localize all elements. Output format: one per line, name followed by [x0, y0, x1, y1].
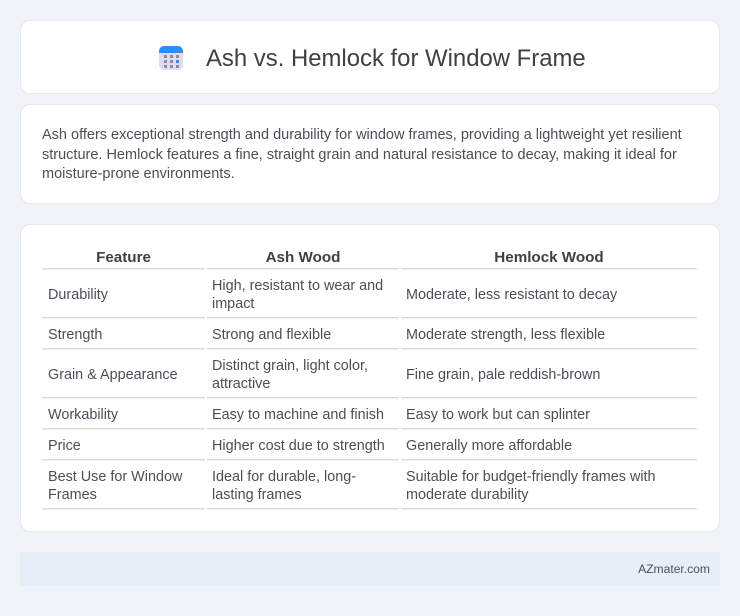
row: best use for window frames: lasting frames: [212, 487, 302, 503]
row: grain and appearance: [42, 358, 697, 399]
intro text: Ash offers exceptional strength and durability for window frames, providing a lightweight yet resilient: [42, 127, 682, 143]
row: durability: [42, 278, 697, 319]
row: strength: Strong and flexible: [212, 327, 331, 343]
row: workability: [42, 407, 697, 430]
panel: comparison table: [20, 224, 720, 532]
row: strength: Moderate strength, less flexible: [406, 327, 605, 343]
row: durability: impact: [212, 296, 254, 312]
footer source text: AZmater.com: [638, 562, 710, 576]
panel: title card: [20, 20, 720, 94]
row: grain and appearance: Grain & Appearance: [48, 367, 178, 383]
row: durability: High, resistant to wear and: [212, 278, 383, 294]
row: best use for window frames: moderate durability: [406, 487, 528, 503]
row: price: Generally more affordable: [406, 438, 572, 454]
row: best use for window frames: [42, 469, 697, 510]
row: durability: Durability: [48, 287, 108, 303]
table header: Hemlock Wood: [494, 249, 604, 266]
intro text: moisture-prone environments.: [42, 166, 235, 182]
row: best use for window frames: Frames: [48, 487, 97, 503]
row: price: Higher cost due to strength: [212, 438, 385, 454]
row: grain and appearance: attractive: [212, 376, 270, 392]
intro text: [42, 127, 682, 182]
row: durability: Moderate, less resistant to decay: [406, 287, 617, 303]
row: strength: [42, 327, 697, 350]
panel: introduction: [20, 104, 720, 204]
icon: calendar: [159, 46, 183, 70]
footer bar: [20, 552, 720, 586]
row: best use for window frames: Best Use for Window: [48, 469, 182, 485]
row: price: Price: [48, 438, 81, 454]
row: grain and appearance: Fine grain, pale reddish-brown: [406, 367, 600, 383]
table header: [42, 249, 697, 270]
row: best use for window frames: Suitable for budget-friendly frames with: [406, 469, 656, 485]
row: workability: Workability: [48, 407, 118, 423]
title: Ash vs. Hemlock for Window Frame: [206, 45, 586, 72]
table header: Feature: [96, 249, 151, 266]
row: best use for window frames: Ideal for durable, long-: [212, 469, 356, 485]
row: grain and appearance: Distinct grain, light color,: [212, 358, 368, 374]
intro text: structure. Hemlock features a fine, straight grain and natural resistance to decay, making it ideal for: [42, 146, 677, 162]
row: workability: Easy to machine and finish: [212, 407, 384, 423]
row: strength: Strength: [48, 327, 102, 343]
table header: Ash Wood: [266, 249, 340, 266]
row: price: [42, 438, 697, 461]
row: workability: Easy to work but can splinter: [406, 407, 590, 423]
